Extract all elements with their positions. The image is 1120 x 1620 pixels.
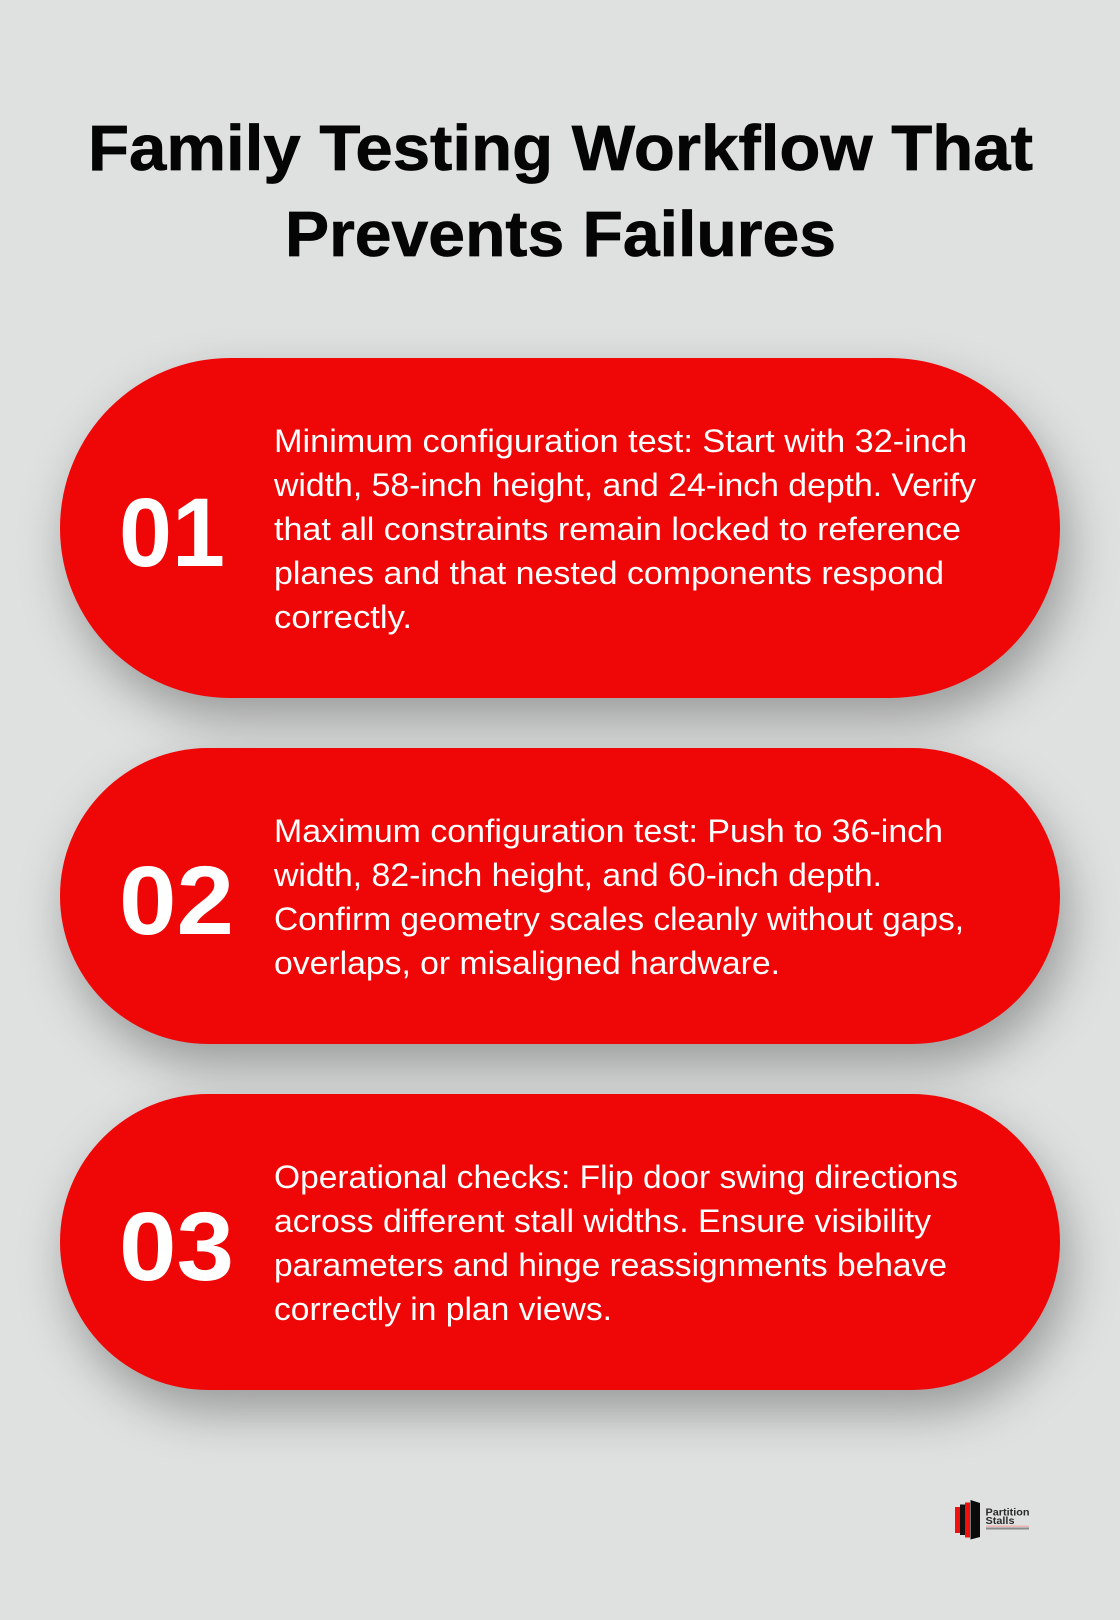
step 02 description: Confirm geometry scales cleanly without gaps, xyxy=(274,901,964,937)
logo: Partition Stalls xyxy=(955,1500,1030,1540)
step 01 description: width, 58-inch height, and 24-inch depth. Verify xyxy=(273,467,977,503)
step 03 description xyxy=(274,1159,958,1327)
icon: partition bars xyxy=(955,1500,980,1540)
step 01 description xyxy=(273,423,977,635)
panel background 03 xyxy=(60,1094,1060,1390)
logo wordmark xyxy=(986,1506,1030,1530)
step 02 description: width, 82-inch height, and 60-inch depth. xyxy=(273,857,882,893)
step 03 description: parameters and hinge reassignments behave xyxy=(274,1247,947,1283)
step 01 description: correctly. xyxy=(274,599,412,635)
step number 01: 01 xyxy=(119,478,225,587)
logo wordmark: Partition xyxy=(986,1506,1030,1518)
panel: step 03 operational checks xyxy=(60,1094,1060,1390)
step 01 description: Minimum configuration test: Start with 32-inch xyxy=(274,423,967,459)
step 03 description: Operational checks: Flip door swing directions xyxy=(274,1159,958,1195)
step number 03: 03 xyxy=(119,1192,234,1301)
step number 02: 02 xyxy=(119,846,234,955)
panel: step 01 minimum configuration test xyxy=(60,358,1060,698)
panel: step 02 maximum configuration test xyxy=(60,748,1060,1044)
step 02 description: overlaps, or misaligned hardware. xyxy=(274,945,780,981)
title xyxy=(88,112,1033,270)
step 02 description xyxy=(273,813,964,981)
step 01 description: that all constraints remain locked to reference xyxy=(274,511,961,547)
title: Prevents Failures xyxy=(285,198,836,270)
title: Family Testing Workflow That xyxy=(88,112,1033,184)
step 03 description: across different stall widths. Ensure visibility xyxy=(274,1203,932,1239)
logo wordmark: Stalls xyxy=(986,1515,1015,1527)
step 03 description: correctly in plan views. xyxy=(274,1291,612,1327)
panel background 01 xyxy=(60,358,1060,698)
panel background 02 xyxy=(60,748,1060,1044)
step 01 description: planes and that nested components respond xyxy=(274,555,944,591)
step 02 description: Maximum configuration test: Push to 36-inch xyxy=(274,813,943,849)
